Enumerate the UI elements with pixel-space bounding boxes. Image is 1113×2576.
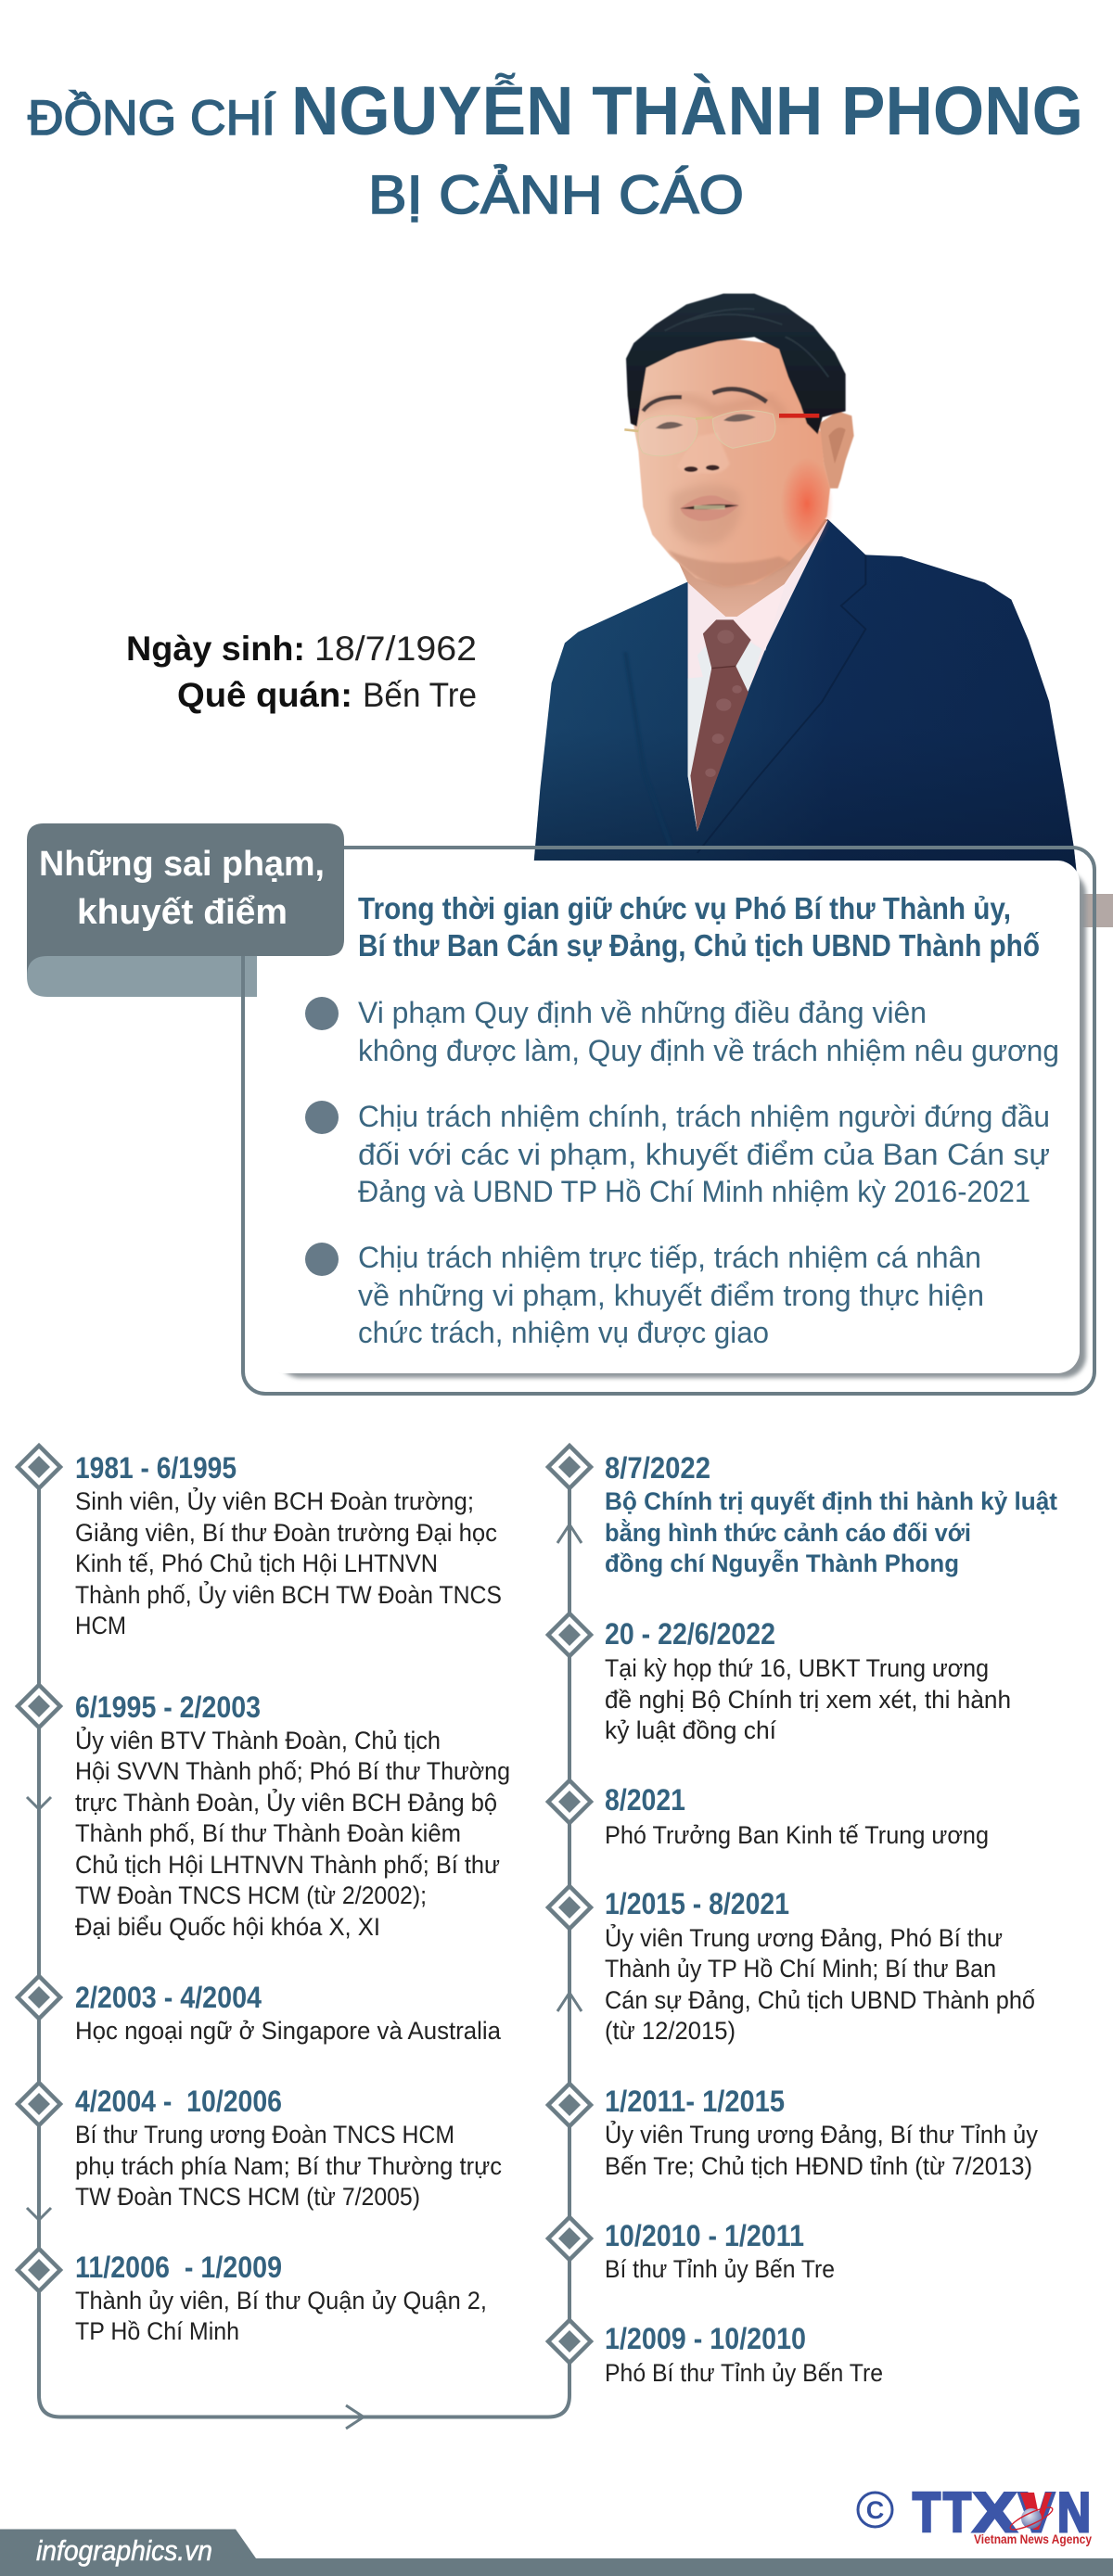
footer band xyxy=(0,2530,1113,2576)
eyes xyxy=(656,422,684,429)
entry 6/2022: 20 - 22/6/2022 xyxy=(605,1617,775,1651)
footer band: infographics.vn xyxy=(36,2534,212,2567)
entry 2015: Thành ủy TP Hồ Chí Minh; Bí thư Ban xyxy=(605,1955,996,1983)
content card xyxy=(262,861,1080,1373)
logo: TTXVN: C xyxy=(866,2496,884,2524)
logo: TTXVN: X xyxy=(973,2481,1017,2544)
heading tab xyxy=(27,823,344,976)
entry 6/2022: kỷ luật đồng chí xyxy=(605,1716,776,1744)
entry 1981 xyxy=(18,1446,502,1639)
logo: TTXVN: T xyxy=(943,2481,971,2544)
entry 2015: Cán sự Đảng, Chủ tịch UBND Thành phố xyxy=(605,1986,1035,2014)
panel heading xyxy=(358,891,1040,963)
bullet 3: Chịu trách nhiệm trực tiếp, trách nhiệm cá nhân xyxy=(358,1241,981,1274)
birth info: Bến Tre xyxy=(363,676,477,714)
entry 2009: Phó Bí thư Tỉnh ủy Bến Tre xyxy=(605,2359,883,2387)
entry 2004 xyxy=(18,2083,502,2211)
face xyxy=(633,337,830,587)
entry 2004: TW Đoàn TNCS HCM (từ 7/2005) xyxy=(75,2183,420,2211)
entry 8/2021: Phó Trưởng Ban Kinh tế Trung ương xyxy=(605,1821,989,1849)
bullet 3 xyxy=(305,1241,984,1349)
entry 2011: Bến Tre; Chủ tịch HĐND tỉnh (từ 7/2013) xyxy=(605,2152,1032,2180)
portrait photo xyxy=(531,294,1080,899)
entry 2004: 4/2004 - 10/2006 xyxy=(75,2085,282,2118)
entry 1981: HCM xyxy=(75,1612,126,1639)
panel heading: Bí thư Ban Cán sự Đảng, Chủ tịch UBND Thành phố xyxy=(358,928,1040,963)
entry 8/7/2022: Bộ Chính trị quyết định thi hành kỷ luật xyxy=(605,1487,1057,1515)
title: NGUYỄN THÀNH PHONG xyxy=(291,72,1083,149)
entry 8/7/2022 xyxy=(548,1446,1057,1577)
entry 2004: Bí thư Trung ương Đoàn TNCS HCM xyxy=(75,2121,454,2149)
entry 8/7/2022: đồng chí Nguyễn Thành Phong xyxy=(605,1549,959,1577)
entry 6/2022: Tại kỳ họp thứ 16, UBKT Trung ương xyxy=(605,1654,989,1682)
entry 2009: 1/2009 - 10/2010 xyxy=(605,2322,806,2355)
logo: TTXVN: N xyxy=(1057,2481,1091,2544)
entry 8/7/2022: 8/7/2022 xyxy=(605,1451,710,1485)
entry 1981: 1981 - 6/1995 xyxy=(75,1451,237,1485)
entry 1981: Sinh viên, Ủy viên BCH Đoàn trường; xyxy=(75,1486,474,1515)
heading tab: khuyết điểm xyxy=(77,893,288,932)
entry 2011: 1/2011- 1/2015 xyxy=(605,2085,785,2118)
entry 8/7/2022: bằng hình thức cảnh cáo đối với xyxy=(605,1518,971,1547)
birth info: Quê quán: xyxy=(177,676,352,714)
entry 8/2021 xyxy=(548,1780,989,1849)
entry 1981: Giảng viên, Bí thư Đoàn trường Đại học xyxy=(75,1519,497,1547)
birth info: 18/7/1962 xyxy=(314,630,477,668)
entry 2010 xyxy=(548,2217,835,2283)
entry 1995: trực Thành Đoàn, Ủy viên BCH Đảng bộ xyxy=(75,1787,497,1817)
entry 6/2022: đề nghị Bộ Chính trị xem xét, thi hành xyxy=(605,1686,1011,1714)
nose xyxy=(677,433,730,474)
entry 1995: Đại biểu Quốc hội khóa X, XI xyxy=(75,1913,380,1941)
entry 1995: Hội SVVN Thành phố; Phó Bí thư Thường xyxy=(75,1757,510,1785)
entry 1995 xyxy=(18,1685,510,1941)
heading tab: Những sai phạm, xyxy=(39,845,325,884)
timeline connector with arrows xyxy=(27,1467,582,2429)
title: ĐỒNG CHÍ xyxy=(28,90,275,146)
timeline right column xyxy=(548,1446,1057,2387)
bullet 2 xyxy=(305,1100,1050,1208)
title: BỊ CẢNH CÁO xyxy=(368,165,744,225)
entry 2015: Ủy viên Trung ương Đảng, Phó Bí thư xyxy=(605,1922,1003,1952)
entry 1995: Chủ tịch Hội LHTNVN Thành phố; Bí thư xyxy=(75,1851,500,1879)
logo: TTXVN xyxy=(858,2481,1092,2546)
logo: TTXVN: T xyxy=(913,2481,940,2544)
entry 2004: phụ trách phía Nam; Bí thư Thường trực xyxy=(75,2152,502,2180)
timeline left column xyxy=(18,1446,510,2345)
tab back xyxy=(27,937,257,997)
hair xyxy=(626,294,846,434)
glasses xyxy=(638,411,775,456)
ear xyxy=(819,411,854,489)
entry 1995: Ủy viên BTV Thành Đoàn, Chủ tịch xyxy=(75,1725,441,1754)
entry 2015 xyxy=(548,1886,1035,2045)
entry 2009 xyxy=(548,2320,883,2387)
entry 1981: Kinh tế, Phó Chủ tịch Hội LHTNVN xyxy=(75,1549,438,1577)
entry 1981: Thành phố, Ủy viên BCH TW Đoàn TNCS xyxy=(75,1579,502,1609)
entry 8/2021: 8/2021 xyxy=(605,1783,685,1817)
entry 2011 xyxy=(548,2084,1038,2180)
entry 2015: 1/2015 - 8/2021 xyxy=(605,1887,789,1920)
entry 1995: 6/1995 - 2/2003 xyxy=(75,1690,261,1724)
eyebrows xyxy=(643,397,682,411)
entry 2011: Ủy viên Trung ương Đảng, Bí thư Tỉnh ủy xyxy=(605,2119,1038,2149)
panel: violations xyxy=(27,823,1113,1394)
bullet 3: về những vi phạm, khuyết điểm trong thực hiện xyxy=(358,1279,984,1312)
mouth xyxy=(680,495,739,521)
entry 2006: Thành ủy viên, Bí thư Quận ủy Quận 2, xyxy=(75,2287,487,2315)
entry 2015: (từ 12/2015) xyxy=(605,2017,736,2045)
entry 2006 xyxy=(18,2249,487,2345)
bullet 1: không được làm, Quy định về trách nhiệm nêu gương xyxy=(358,1034,1059,1067)
entry 2010: 10/2010 - 1/2011 xyxy=(605,2219,804,2252)
logo: TTXVN: Vietnam News Agency xyxy=(974,2531,1092,2546)
entry 6/2022 xyxy=(548,1613,1011,1744)
logo: TTXVN: V xyxy=(1018,2481,1055,2544)
entry 2006: 11/2006 - 1/2009 xyxy=(75,2251,282,2284)
bullet 1 xyxy=(305,996,1059,1067)
entry 1995: Thành phố, Bí thư Thành Đoàn kiêm xyxy=(75,1819,461,1847)
bullet 3: chức trách, nhiệm vụ được giao xyxy=(358,1316,769,1349)
entry 2010: Bí thư Tỉnh ủy Bến Tre xyxy=(605,2255,835,2283)
birth info xyxy=(126,630,477,714)
bullet 2: Chịu trách nhiệm chính, trách nhiệm người đứng đầu xyxy=(358,1100,1050,1133)
right edge marker xyxy=(1080,894,1113,927)
birth info: Ngày sinh: xyxy=(126,630,305,668)
panel heading: Trong thời gian giữ chức vụ Phó Bí thư Thành ủy, xyxy=(358,891,1011,925)
entry 2003: 2/2003 - 4/2004 xyxy=(75,1981,262,2014)
bullet 1: Vi phạm Quy định về những điều đảng viên xyxy=(358,996,927,1029)
outer frame xyxy=(243,848,1094,1394)
bullet 2: Đảng và UBND TP Hồ Chí Minh nhiệm kỳ 2016-2021 xyxy=(358,1175,1030,1208)
entry 2003: Học ngoại ngữ ở Singapore và Australia xyxy=(75,2017,502,2045)
bullet 2: đối với các vi phạm, khuyết điểm của Ban Cán sự xyxy=(358,1138,1050,1171)
title xyxy=(28,72,1083,225)
card shadow xyxy=(278,872,1086,1378)
entry 2003 xyxy=(18,1976,502,2045)
entry 2006: TP Hồ Chí Minh xyxy=(75,2317,239,2345)
entry 1995: TW Đoàn TNCS HCM (từ 2/2002); xyxy=(75,1881,427,1909)
